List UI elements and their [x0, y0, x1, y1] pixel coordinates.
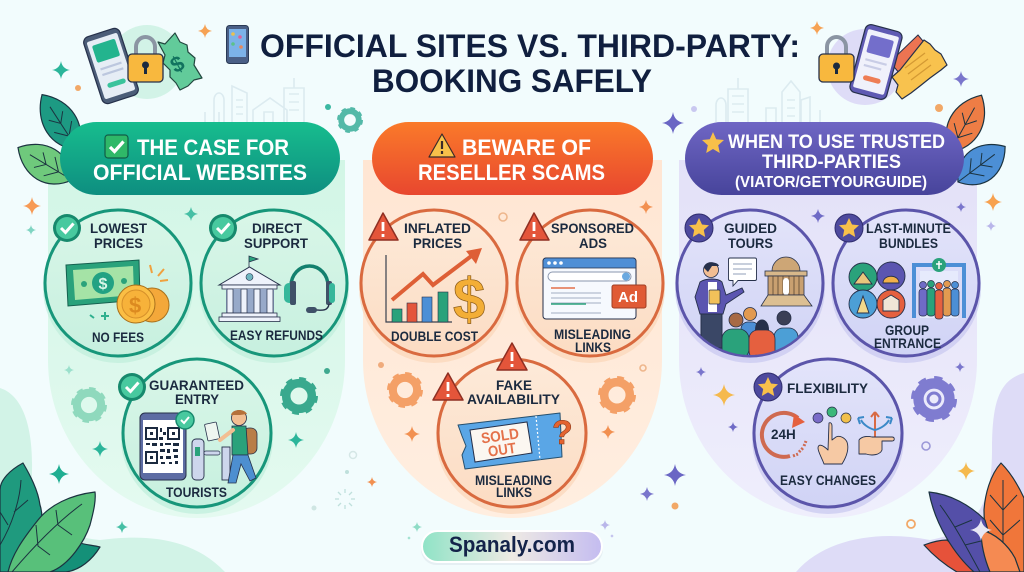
- icon: bank building: [219, 256, 280, 322]
- icon: 24 hour arrow: [762, 413, 806, 457]
- circle: direct support: [199, 210, 349, 363]
- icon: hand with direction arrows: [858, 412, 894, 455]
- circle: guided tours: GUIDED: [724, 220, 777, 236]
- header: beware of reseller scams: [372, 122, 653, 195]
- title: BOOKING SAFELY: [372, 63, 652, 99]
- circle: flexibility: EASY CHANGES: [780, 472, 876, 488]
- header: when to use trusted third-parties: (VIATOR/GETYOURGUIDE): [735, 174, 927, 191]
- footer pill: Spanaly.com: [421, 531, 603, 565]
- circle: last-minute bundles: BUNDLES: [879, 235, 938, 251]
- header: when to use trusted third-parties: THIRD-PARTIES: [762, 152, 901, 173]
- icon: tourist with ticket: [204, 410, 257, 483]
- header: the case for official websites: OFFICIAL WEBSITES: [93, 160, 307, 185]
- circle: inflated prices: INFLATED: [404, 220, 471, 236]
- icon: left warning triangle: [433, 373, 463, 400]
- icon: top warning triangle: [497, 343, 527, 370]
- panel: reseller scams background: [363, 160, 662, 518]
- circle: sponsored ads: LINKS: [575, 339, 611, 355]
- circle: fake availability: MISLEADING: [475, 472, 552, 488]
- icon: warning triangle: [429, 134, 455, 157]
- circle: guaranteed entry: ENTRY: [175, 391, 220, 407]
- icon: star badge: [835, 214, 863, 242]
- icon: entry gate: [192, 439, 230, 480]
- circle: inflated prices: PRICES: [413, 235, 462, 251]
- icon: check badge: [209, 214, 237, 242]
- circle: last-minute bundles: LAST-MINUTE: [866, 220, 951, 236]
- icon: 24 hour arrow: 24H: [771, 427, 796, 442]
- chart: rising bars and arrow: [386, 248, 482, 322]
- icon: sold out ticket: [458, 413, 573, 469]
- circle: sponsored ads: SPONSORED: [551, 220, 634, 236]
- icon: tour guide: [695, 262, 744, 348]
- circle: guaranteed entry: [118, 359, 273, 514]
- icon: gold star: [702, 132, 724, 153]
- circle: lowest prices: NO FEES: [92, 329, 144, 345]
- icon: check badge: [53, 214, 81, 242]
- circle: direct support: SUPPORT: [244, 235, 308, 251]
- icon: warning triangle: [369, 213, 398, 240]
- circle: last-minute bundles: ENTRANCE: [874, 335, 941, 351]
- icon: museum landmark: [761, 257, 812, 306]
- circle: sponsored ads: [515, 210, 665, 363]
- icon: attraction bundle circles: [849, 262, 905, 318]
- icon: pointing hand with choices: [813, 407, 851, 464]
- icon: browser window with ad: [543, 258, 646, 319]
- icon: banknote and coins: $: [98, 276, 108, 293]
- circle: lowest prices: LOWEST: [90, 220, 147, 236]
- header: the case for official websites: THE CASE FOR: [137, 135, 289, 160]
- circle: last-minute bundles: GROUP: [885, 322, 929, 338]
- icon: group entrance gate: [914, 258, 964, 319]
- icon: banknote and coins: [66, 260, 169, 323]
- circle: sponsored ads: MISLEADING: [554, 326, 631, 342]
- header: when to use trusted third-parties: [685, 122, 964, 195]
- circle: sponsored ads: ADS: [579, 235, 607, 251]
- decorative gears: [74, 109, 954, 420]
- icon: green check box: [105, 135, 128, 158]
- icon: gold dollar sign: $: [453, 267, 485, 332]
- icon: warning triangle: [520, 213, 549, 240]
- decorative leaves: top: [9, 86, 1016, 196]
- circle: inflated prices: [359, 210, 509, 363]
- faint city skylines: [205, 78, 820, 122]
- icon: sold out ticket: SOLD: [480, 425, 520, 447]
- header: when to use trusted third-parties: WHEN TO USE TRUSTED: [728, 132, 945, 153]
- circle: fake availability: FAKE: [496, 377, 532, 393]
- circle: last-minute bundles: [831, 210, 981, 363]
- icon: star badge: [754, 373, 782, 401]
- panel: official websites background: [48, 160, 345, 518]
- icon: headset: [284, 266, 335, 313]
- circle: guided tours: TOURS: [728, 235, 773, 251]
- decorative leaves: bottom right: [924, 463, 1024, 572]
- icon: phone with QR code: [140, 411, 194, 480]
- title: OFFICIAL SITES VS. THIRD-PARTY:: [260, 28, 800, 64]
- icon: star badge: [685, 214, 713, 242]
- decorative leaves: bottom left: [0, 463, 100, 572]
- circle: direct support: EASY REFUNDS: [230, 327, 323, 343]
- circle: guaranteed entry: GUARANTEED: [149, 377, 244, 393]
- circle: lowest prices: [43, 210, 193, 363]
- icon: browser window with ad: Ad: [618, 289, 638, 306]
- circle: flexibility: FLEXIBILITY: [787, 380, 869, 396]
- footer pill: Spanaly.com: Spanaly.com: [449, 532, 575, 557]
- panel: third parties background: [679, 160, 977, 518]
- icon: speech bubble: [728, 258, 756, 286]
- icon: tour group: [722, 308, 798, 360]
- circle: lowest prices: PRICES: [94, 235, 143, 251]
- circle: fake availability: LINKS: [496, 484, 532, 500]
- circle: fake availability: [433, 343, 588, 514]
- icon: check badge: [118, 373, 146, 401]
- icon: sold out ticket: ?: [552, 414, 573, 452]
- icon: banknote and coins: $: [129, 293, 141, 318]
- circle: direct support: DIRECT: [252, 220, 302, 236]
- icon: lock, phone and yellow ticket: [819, 23, 947, 105]
- circle: flexibility: [752, 359, 904, 514]
- icon: title phone: [226, 26, 248, 64]
- header: the case for official websites: [60, 122, 340, 195]
- circle: inflated prices: DOUBLE COST: [391, 328, 478, 344]
- title: [260, 28, 800, 99]
- icon: sold out ticket: OUT: [487, 440, 517, 461]
- circle: guided tours: [675, 210, 825, 363]
- icon: phone, lock and green ticket: $: [166, 50, 189, 78]
- header: beware of reseller scams: BEWARE OF: [462, 135, 591, 160]
- circle: fake availability: AVAILABILITY: [467, 391, 561, 407]
- background blobs: [0, 373, 1024, 572]
- icon: phone, lock and green ticket: [82, 25, 202, 105]
- header: beware of reseller scams: RESELLER SCAMS: [418, 160, 605, 185]
- circle: guaranteed entry: TOURISTS: [166, 484, 227, 500]
